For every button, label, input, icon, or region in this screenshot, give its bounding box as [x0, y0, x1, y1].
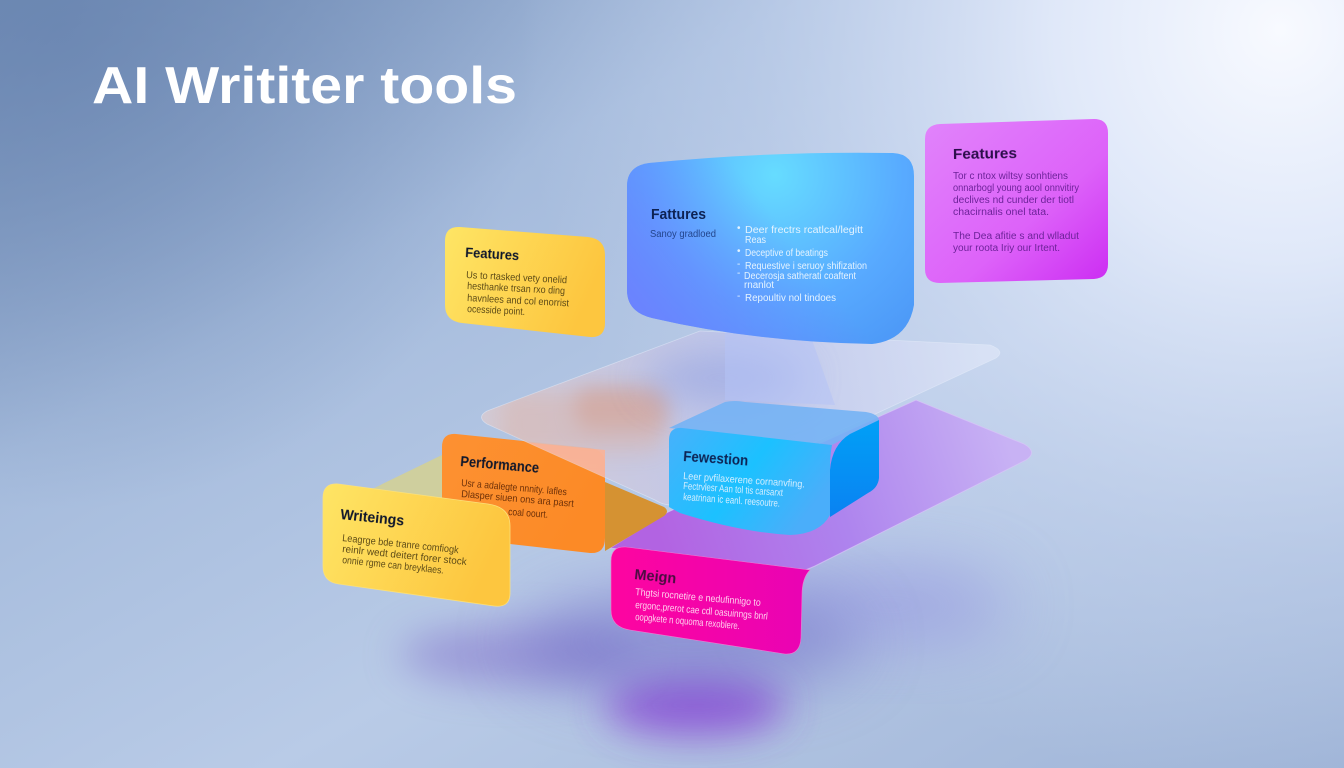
text: performance body: [461, 478, 574, 521]
text: performance body: Usr a adalegte nnnity. lafles: [461, 478, 567, 498]
heading: yellow features: Features: [465, 244, 520, 263]
list: blue card bullets: -: [737, 291, 740, 302]
text: meign body: Thgtsi rocnetire e nedufinnigo to: [635, 587, 762, 609]
text: meign body: ergonc,prerot cae cdl oasuinngs bnrl: [635, 600, 768, 623]
text: yellow body: hesthanke trsan rxo ding: [467, 281, 565, 297]
heading: meign: Meign: [634, 566, 677, 587]
text: magenta body: [953, 171, 1079, 254]
text: writings body: reinlr wedt deitert forer stock: [342, 544, 468, 568]
panel: blue feweston box: [669, 401, 879, 535]
title: AI Writiter tools: [92, 57, 517, 115]
panel: yellow features card: [445, 227, 605, 337]
list: blue card bullets: Reas: [745, 235, 766, 246]
text: meign body: [635, 587, 768, 632]
text: magenta body: Tor c ntox wiltsy sonhtiens: [953, 171, 1068, 182]
heading: writings: Writeings: [340, 506, 405, 530]
text: performance body: coal oourt.: [508, 507, 548, 521]
text: blue card subtitle: Sanoy gradloed: [650, 229, 716, 240]
triangle: olive glass behind writing card: [368, 455, 442, 500]
box top face: [669, 401, 879, 445]
list: blue card bullets: -: [737, 259, 740, 270]
panel: purple glass platform: [610, 400, 1032, 572]
list: blue card bullets: Repoultiv nol tindoes: [745, 293, 836, 304]
list: blue card bullets: •: [737, 223, 741, 234]
text: feweston body: keatrinan ic eanl. reesoutre.: [683, 492, 780, 510]
box front face: [669, 428, 832, 535]
text: feweston body: Fectrvlesr Aan tol tis carsarxt: [683, 481, 783, 499]
text: magenta body: The Dea afitie s and wlladut: [953, 231, 1079, 242]
panel: writings card: [323, 484, 510, 606]
list: blue card bullets: Deceptive of beatings: [745, 248, 828, 259]
text: writings body: Leagrge bde tranre comfiogk: [342, 533, 460, 556]
panel: top blue features card: [627, 153, 914, 344]
list: blue card bullets: -: [737, 268, 740, 279]
list: blue card bullets: Decerosja satherati coaftent: [744, 271, 856, 282]
text: writings body: [342, 533, 468, 577]
text: yellow body: havnlees and col enorrist: [467, 293, 569, 309]
text: writings body: onnie rgme can breyklaes.: [342, 555, 444, 577]
heading: performance: Performance: [460, 453, 540, 477]
text: magenta body: declives nd cunder der tiotl: [953, 195, 1074, 206]
panel: magenta design card: [611, 547, 810, 654]
text: magenta body: your roota Iriy our Irtent.: [953, 243, 1060, 254]
list: blue card bullets: [737, 223, 867, 304]
floor shadows: [400, 567, 1010, 735]
list: blue card bullets: Requestive i seruoy shifization: [745, 261, 867, 272]
panel: frosted glass platform: [442, 330, 1000, 505]
list: blue card bullets: rnanlot: [744, 280, 774, 291]
list: blue card bullets: Deer frectrs rcatlcal/legitt: [745, 225, 863, 236]
text: meign body: oopgkete n oquoma rexoblere.: [635, 612, 740, 632]
heading: magenta features: Features: [953, 145, 1017, 163]
text: magenta body: onnarbogl young aool onnvitiry: [953, 183, 1079, 194]
text: yellow body: ocesside point.: [467, 304, 525, 318]
triangle: amber extension: [605, 482, 667, 551]
panel: magenta features card: [925, 119, 1108, 283]
panel: performance card: [442, 434, 667, 553]
text: magenta body: chacirnalis onel tata.: [953, 207, 1049, 218]
heading: feweston: Fewestion: [683, 448, 749, 470]
heading: fattures: Fattures: [651, 206, 706, 223]
box side face: [830, 420, 879, 517]
text: yellow body: Us to rtasked vety onelid: [466, 270, 567, 286]
text: feweston body: [683, 471, 805, 510]
text: feweston body: Leer pvfilaxerene cornanvfing.: [683, 471, 805, 491]
text: performance body: Dlasper siuen ons ara pasrt: [461, 489, 574, 510]
text: yellow body: [466, 270, 569, 318]
list: blue card bullets: •: [737, 246, 741, 257]
